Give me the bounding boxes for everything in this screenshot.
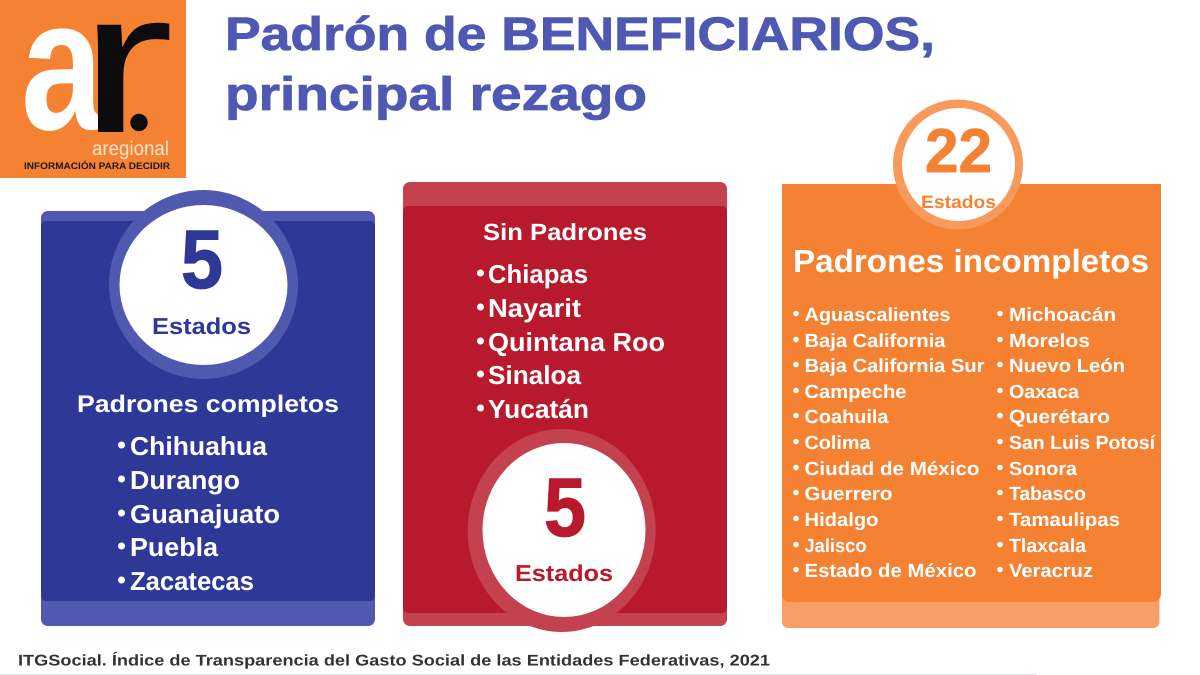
list: estados con padrones incompletos, columna 1: Hidalgo xyxy=(804,510,878,531)
list: estados con padrones incompletos, columna 1: Baja California Sur xyxy=(804,356,985,377)
list: estados con padrones incompletos, columna 2: San Luis Potosí xyxy=(1009,433,1156,454)
list: estados sin padrones xyxy=(477,259,665,424)
list: estados con padrones incompletos, columna 2 xyxy=(997,305,1156,582)
badge: 5 estados xyxy=(109,190,298,379)
badge: 22 estados xyxy=(893,100,1023,230)
list: estados con padrones incompletos, columna 2: Veracruz xyxy=(1009,561,1093,582)
list: estados sin padrones: Chiapas xyxy=(488,259,588,289)
list: estados con padrones incompletos, columna 1: Colima xyxy=(804,433,871,454)
panel: padrones completos xyxy=(41,190,375,626)
list: estados con padrones incompletos, columna 2: Tamaulipas xyxy=(1009,510,1120,531)
list: estados con padrones incompletos, columna 2: Michoacán xyxy=(1009,305,1116,326)
badge: 5 estados: 5 xyxy=(544,461,586,554)
logo: aregional: aregional xyxy=(92,138,169,160)
badge: 22 estados: 22 xyxy=(925,117,992,186)
list: estados con padrones incompletos, columna 2: Morelos xyxy=(1009,331,1090,352)
list: estados sin padrones: Yucatán xyxy=(488,394,589,424)
list: estados con padrones completos: Zacatecas xyxy=(130,566,254,596)
list: estados sin padrones: Sinaloa xyxy=(488,360,582,390)
heading: padrones completos: Padrones completos xyxy=(77,391,339,418)
list: estados con padrones incompletos, columna 2: Tlaxcala xyxy=(1009,536,1086,557)
badge: 5 estados xyxy=(468,429,656,632)
list: estados con padrones completos: Puebla xyxy=(130,532,219,562)
list: estados con padrones incompletos, columna 2: Tabasco xyxy=(1009,484,1086,505)
heading: padrones incompletos: Padrones incompletos xyxy=(793,243,1149,279)
list: estados con padrones incompletos, columna 1: Ciudad de México xyxy=(804,459,980,480)
list: estados con padrones incompletos, columna 1: Campeche xyxy=(804,382,906,403)
list: estados con padrones completos xyxy=(118,431,280,596)
list: estados con padrones incompletos, columna 1: Jalisco xyxy=(804,536,866,557)
list: estados con padrones incompletos, columna 2: Sonora xyxy=(1009,459,1077,480)
title: principal rezago xyxy=(225,67,647,120)
list: estados sin padrones: Nayarit xyxy=(488,293,581,323)
title xyxy=(225,7,935,120)
panel: padrones incompletos xyxy=(782,100,1161,628)
logo: aregional: INFORMACIÓN PARA DECIDIR xyxy=(24,160,170,172)
source note: ITGSocial. Índice de Transparencia del Gasto Social de las Entidades Federativas, 2021 xyxy=(18,652,770,670)
title: Padrón de BENEFICIARIOS, xyxy=(225,7,935,60)
list: estados con padrones incompletos, columna 2: Oaxaca xyxy=(1009,382,1079,403)
list: estados con padrones incompletos, columna 2: Nuevo León xyxy=(1009,356,1125,377)
logo: aregional xyxy=(0,0,186,178)
badge: 5 estados: Estados xyxy=(515,560,613,586)
badge: 22 estados: Estados xyxy=(921,192,996,212)
list: estados con padrones incompletos, columna 1: Aguascalientes xyxy=(804,305,950,326)
list: estados con padrones completos: Guanajuato xyxy=(130,499,280,529)
heading: sin padrones: Sin Padrones xyxy=(483,219,647,245)
badge: 5 estados: Estados xyxy=(152,313,251,339)
list: estados con padrones incompletos, columna 1: Guerrero xyxy=(804,484,892,505)
list: estados con padrones incompletos, columna 2: Querétaro xyxy=(1009,407,1110,428)
panel: sin padrones xyxy=(403,182,727,632)
list: estados sin padrones: Quintana Roo xyxy=(488,327,665,357)
list: estados con padrones incompletos, columna 1: Baja California xyxy=(804,331,946,352)
list: estados con padrones incompletos, columna 1: Estado de México xyxy=(804,561,976,582)
list: estados con padrones incompletos, columna 1: Coahuila xyxy=(804,407,889,428)
list: estados con padrones incompletos, columna 1 xyxy=(793,305,985,582)
badge: 5 estados: 5 xyxy=(181,213,223,306)
list: estados con padrones completos: Chihuahua xyxy=(130,431,268,461)
list: estados con padrones completos: Durango xyxy=(130,465,240,495)
